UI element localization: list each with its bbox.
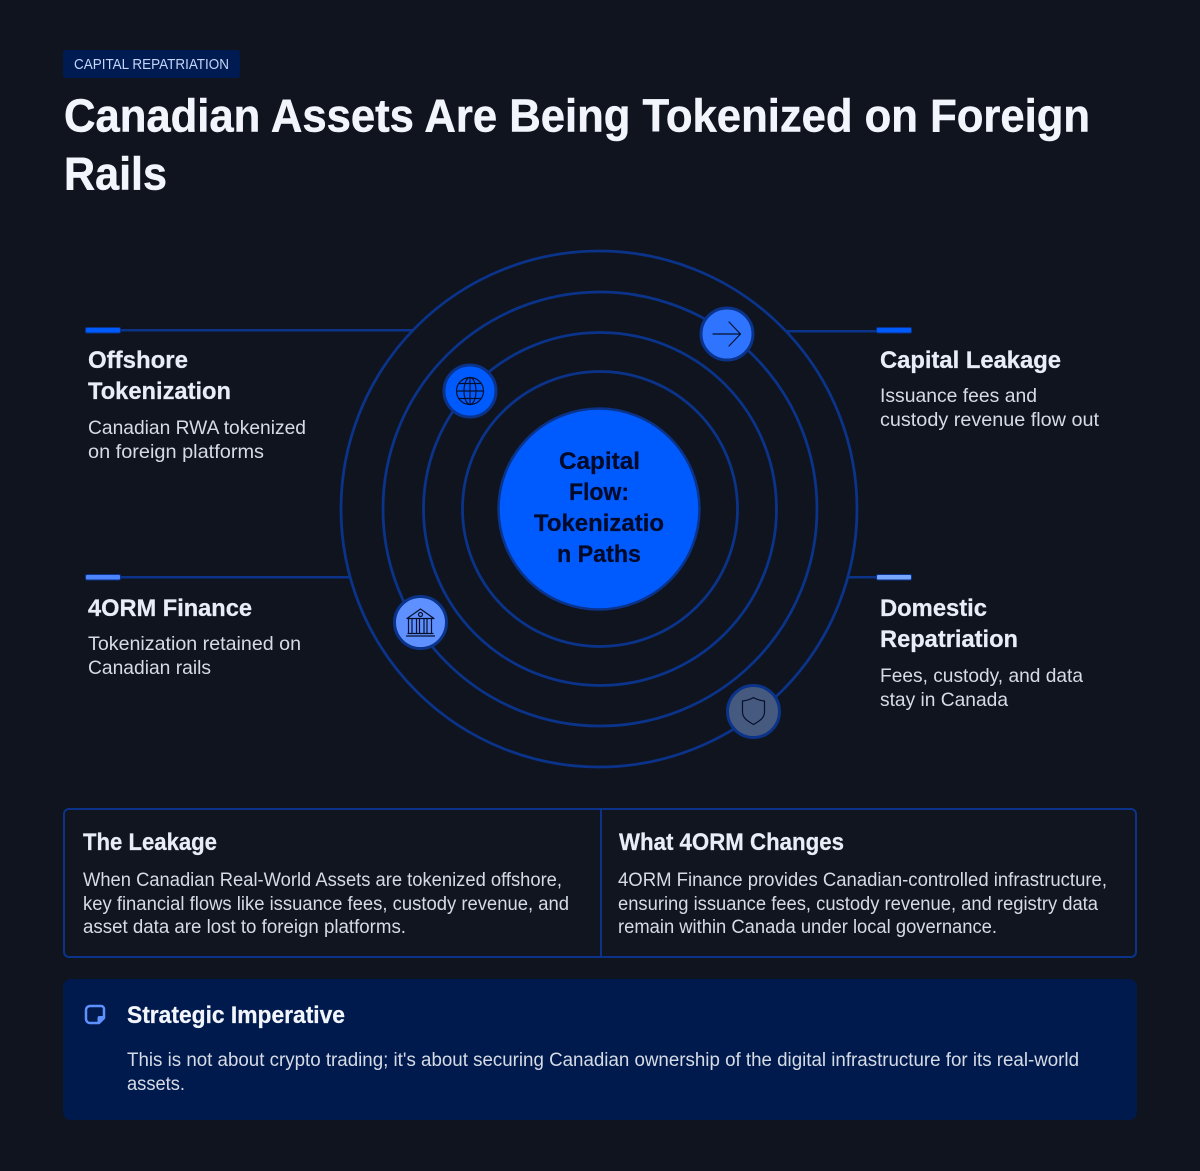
card: the leakage: When Canadian Real-World Assets are tokenized offshore, (83, 870, 562, 891)
icon: note (86, 1006, 105, 1024)
label: domestic repatriation: stay in Canada (880, 689, 1008, 711)
label: capital leakage: Capital Leakage (880, 347, 1061, 374)
center circle: capital flow: Capital (559, 448, 640, 475)
label: 4ORM finance: 4ORM Finance (88, 595, 252, 622)
orbit rings (341, 251, 857, 767)
connector: 4ORM finance (85, 574, 350, 580)
card: what 4ORM changes (618, 829, 1107, 938)
callout: strategic imperative: This is not about crypto trading; it's about securing Canadian ownership of the digital infrastructure for its real-world (127, 1050, 1079, 1071)
callout: strategic imperative: Strategic Imperative (127, 1002, 345, 1029)
card: what 4ORM changes: What 4ORM Changes (619, 829, 844, 856)
icon: globe node (444, 365, 496, 417)
label: offshore tokenization: Tokenization (88, 378, 231, 405)
card: what 4ORM changes: 4ORM Finance provides Canadian-controlled infrastructure, (618, 870, 1107, 891)
label: offshore tokenization (88, 347, 306, 463)
connector: domestic repatriation (849, 574, 912, 580)
card: the leakage: asset data are lost to foreign platforms. (83, 917, 406, 938)
label: offshore tokenization: on foreign platforms (88, 441, 264, 463)
callout: strategic imperative: assets. (127, 1074, 185, 1095)
center circle: capital flow (498, 408, 700, 610)
label: domestic repatriation: Repatriation (880, 626, 1018, 653)
label: 4ORM finance: Canadian rails (88, 657, 211, 679)
label: offshore tokenization: Offshore (88, 347, 188, 374)
callout: strategic imperative (63, 979, 1137, 1120)
connector: capital leakage (787, 328, 912, 333)
icon: arrow node (701, 308, 753, 360)
label: domestic repatriation (880, 595, 1083, 711)
label: offshore tokenization: Canadian RWA tokenized (88, 417, 306, 439)
label: 4ORM finance: Tokenization retained on (88, 633, 301, 655)
center circle: capital flow: n Paths (557, 541, 641, 568)
label: domestic repatriation: Fees, custody, and data (880, 665, 1083, 687)
orbit diagram (341, 251, 857, 767)
card: the leakage (83, 829, 569, 938)
card: what 4ORM changes: remain within Canada under local governance. (618, 917, 997, 938)
center circle: capital flow: Tokenizatio (534, 510, 664, 537)
icon: bank node (394, 596, 446, 648)
title: Rails (64, 148, 167, 200)
card: the leakage: key financial flows like issuance fees, custody revenue, and (83, 894, 569, 915)
comparison panel (64, 809, 1136, 957)
label: 4ORM finance (88, 595, 301, 679)
tag: capital repatriation: CAPITAL REPATRIATION (74, 57, 229, 73)
label: capital leakage (880, 347, 1100, 431)
card: what 4ORM changes: ensuring issuance fees, custody revenue, and registry data (618, 894, 1098, 915)
icon: shield node (728, 686, 780, 738)
label: capital leakage: Issuance fees and (880, 385, 1037, 407)
title (64, 90, 1090, 200)
card: the leakage: The Leakage (83, 829, 217, 856)
tag: capital repatriation (63, 50, 240, 78)
center circle: capital flow: Flow: (569, 479, 629, 506)
label: capital leakage: custody revenue flow out (880, 409, 1100, 431)
label: domestic repatriation: Domestic (880, 595, 987, 622)
title: Canadian Assets Are Being Tokenized on Foreign (64, 90, 1090, 142)
connector: offshore tokenization (85, 328, 412, 333)
